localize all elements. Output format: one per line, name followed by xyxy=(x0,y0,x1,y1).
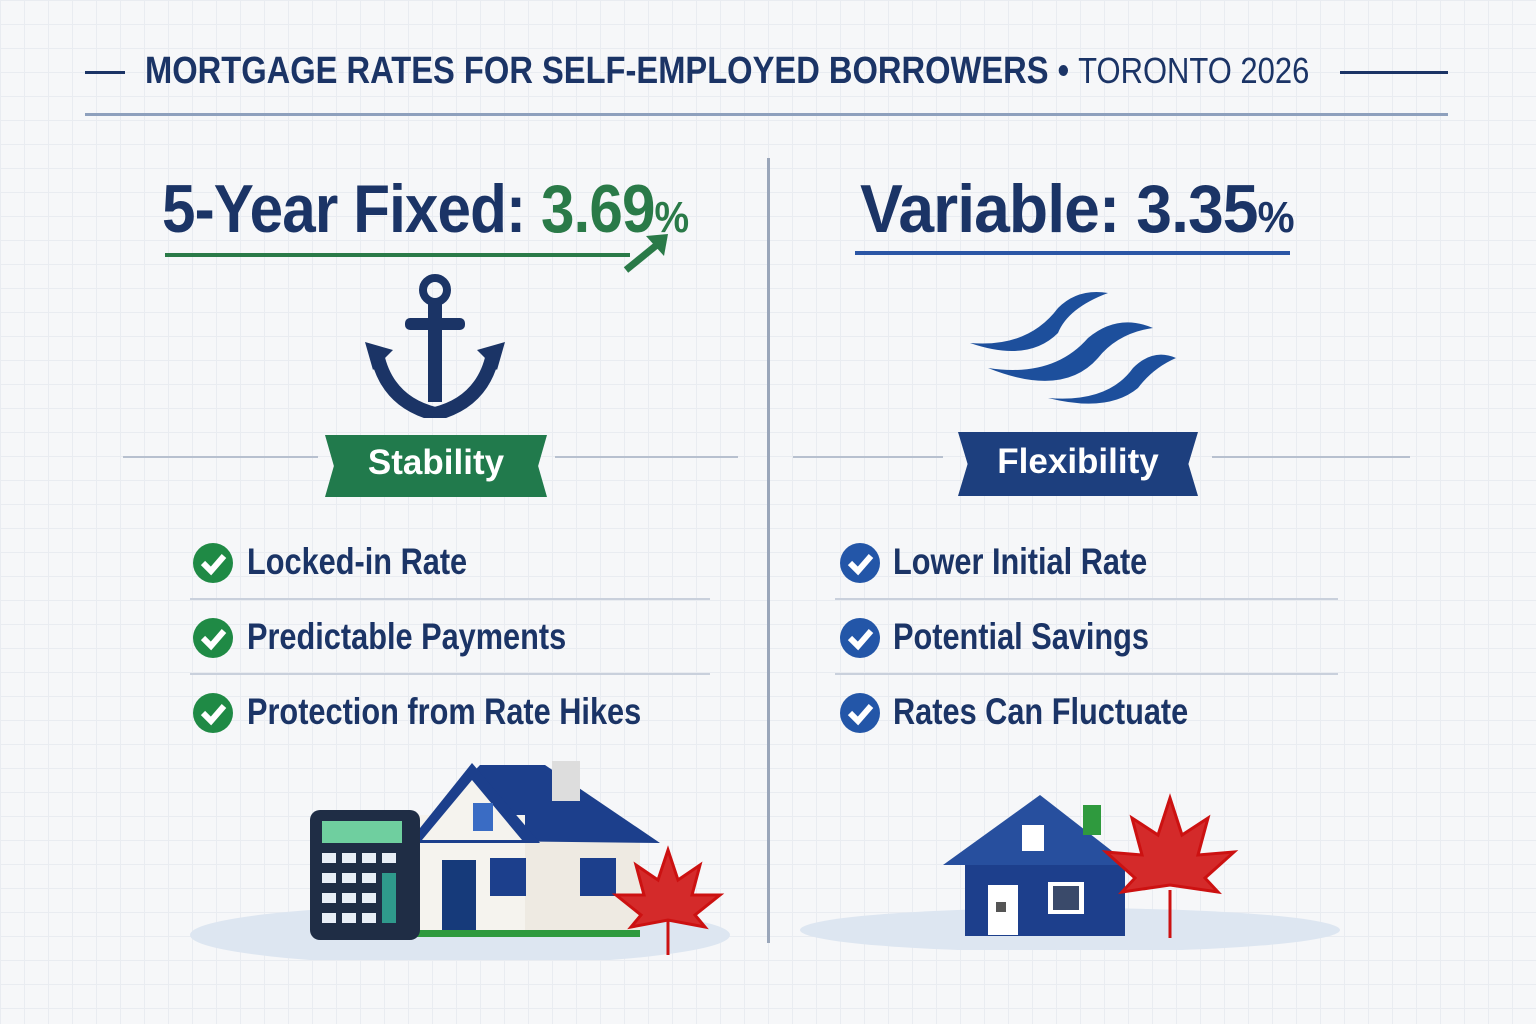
list: variable benefits: Potential Savings xyxy=(893,616,1149,657)
list: variable benefits: Rates Can Fluctuate xyxy=(893,691,1188,732)
list: fixed benefits xyxy=(190,541,710,733)
icon: waves xyxy=(970,292,1176,404)
heading: variable rate: Variable: 3.35% xyxy=(860,171,1294,247)
list: fixed benefits: Locked-in Rate xyxy=(247,541,467,582)
ribbon: flexibility: Flexibility xyxy=(997,442,1159,481)
list: fixed benefits: Protection from Rate Hikes xyxy=(247,691,641,732)
heading: fixed rate: 5-Year Fixed: 3.69% xyxy=(162,171,688,247)
list: variable benefits: Lower Initial Rate xyxy=(893,541,1147,582)
illustration: house with calculator xyxy=(190,761,730,960)
icon: anchor xyxy=(365,274,505,418)
ribbon: stability: Stability xyxy=(368,443,504,482)
ribbon: flexibility xyxy=(958,432,1198,496)
illustration: blue house with maple xyxy=(800,793,1340,950)
title: MORTGAGE RATES FOR SELF-EMPLOYED BORROWERS • TORONTO 2026 xyxy=(145,50,1309,92)
panel: fixed xyxy=(123,171,738,733)
ribbon: stability xyxy=(325,435,547,497)
icon: arrow up xyxy=(624,234,668,273)
list: fixed benefits: Predictable Payments xyxy=(247,616,566,657)
list: variable benefits xyxy=(835,541,1338,733)
panel: variable xyxy=(793,171,1410,733)
vertical divider xyxy=(767,158,770,943)
